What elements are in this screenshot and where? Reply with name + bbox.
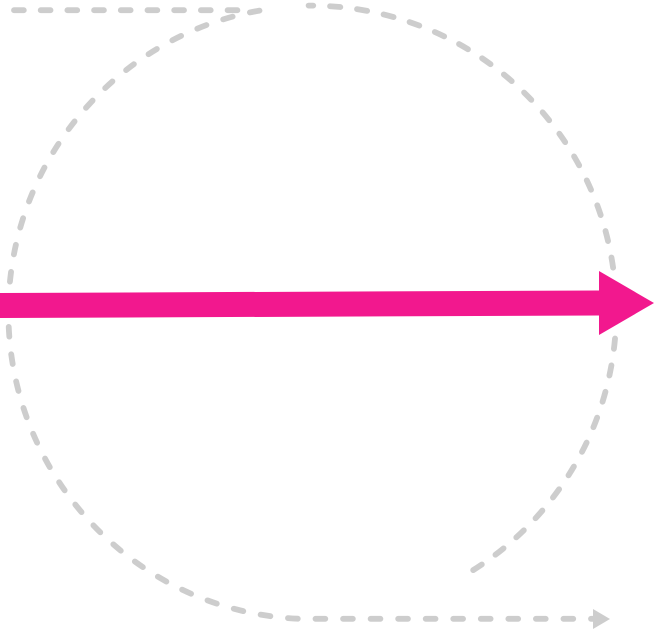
arrow: pink horizontal xyxy=(0,271,654,335)
arrowhead: gray exit with short stub xyxy=(591,609,610,629)
dashed line: top-left entry xyxy=(14,7,241,13)
dashed arc: top right around to lower right xyxy=(309,6,616,572)
